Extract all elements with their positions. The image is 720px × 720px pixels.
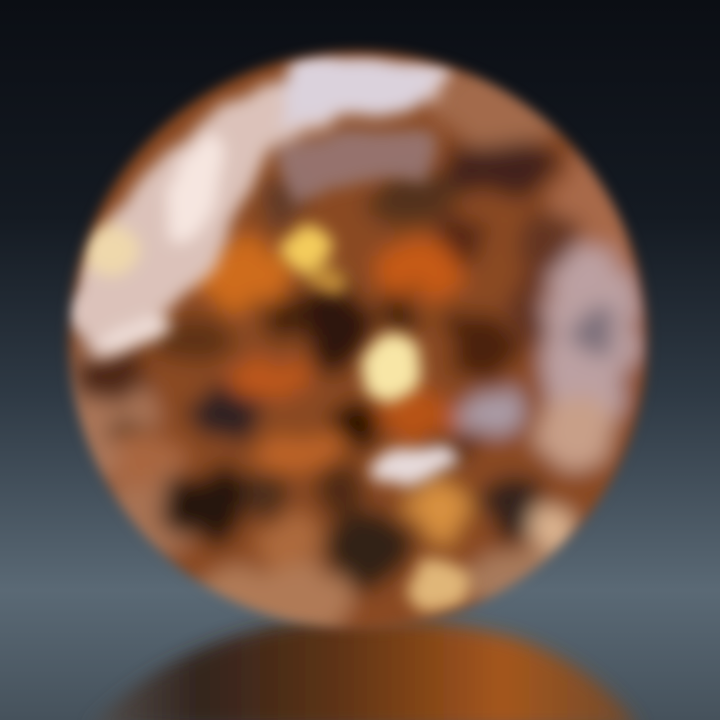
base tone — [62, 42, 655, 634]
rim lighter tones — [50, 340, 150, 480]
pale lilac area on right edge — [544, 245, 640, 435]
bright orange patches — [199, 236, 291, 304]
golden and white highlights — [281, 229, 470, 611]
dark brown mottling — [440, 142, 560, 198]
gemstone: circular stone with mottled inclusions — [61, 42, 655, 634]
pedestal: orange-brown base under gemstone — [90, 619, 640, 720]
pale sheen across upper left — [62, 57, 450, 362]
